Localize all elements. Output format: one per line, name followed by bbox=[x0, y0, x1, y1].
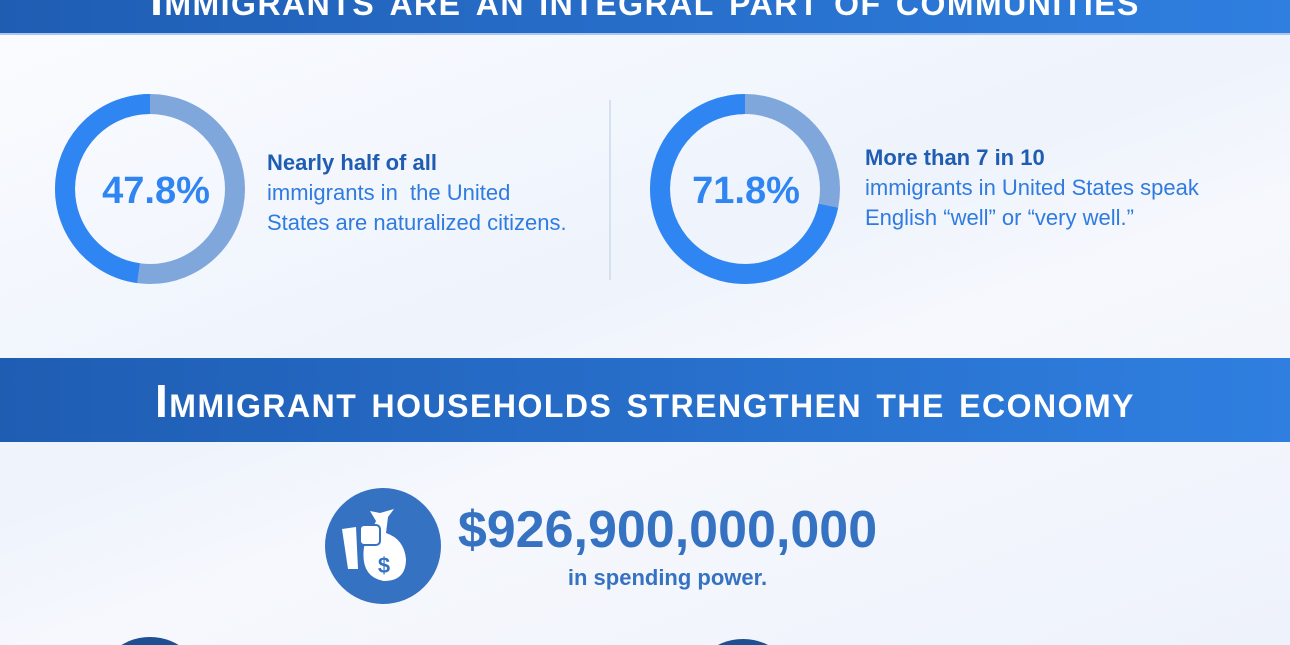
stat: spending power: $926,900,000,000 bbox=[458, 501, 877, 559]
stat: spending power bbox=[458, 501, 877, 590]
donut chart: 47.8%: 47.8% bbox=[102, 170, 210, 212]
text: naturalized citizens: States are naturalized citizens. bbox=[267, 210, 567, 235]
top banner bbox=[0, 0, 1290, 35]
stat: spending power: in spending power. bbox=[568, 565, 767, 590]
text: English speakers: English “well” or “very well.” bbox=[865, 205, 1134, 230]
donut chart: 47.8% bbox=[55, 94, 245, 284]
icon: money bag bbox=[325, 488, 441, 604]
icon: money bag: $ bbox=[378, 553, 390, 578]
text: naturalized citizens: Nearly half of all bbox=[267, 150, 437, 175]
text: naturalized citizens bbox=[267, 150, 567, 235]
donut chart: 71.8%: 71.8% bbox=[692, 170, 800, 212]
text: English speakers: More than 7 in 10 bbox=[865, 145, 1045, 170]
section banner: economy bbox=[0, 358, 1290, 442]
section banner: economy: Immigrant households strengthen the economy bbox=[155, 375, 1135, 427]
donut chart: 71.8% bbox=[650, 94, 840, 284]
divider bbox=[609, 100, 611, 280]
text: naturalized citizens: immigrants in the United bbox=[267, 180, 510, 205]
text: English speakers bbox=[865, 145, 1199, 230]
bottom icon circle 2 (cropped) bbox=[718, 639, 768, 645]
text: English speakers: immigrants in United States speak bbox=[865, 175, 1199, 200]
bottom icon circle 1 (cropped) bbox=[122, 637, 178, 645]
